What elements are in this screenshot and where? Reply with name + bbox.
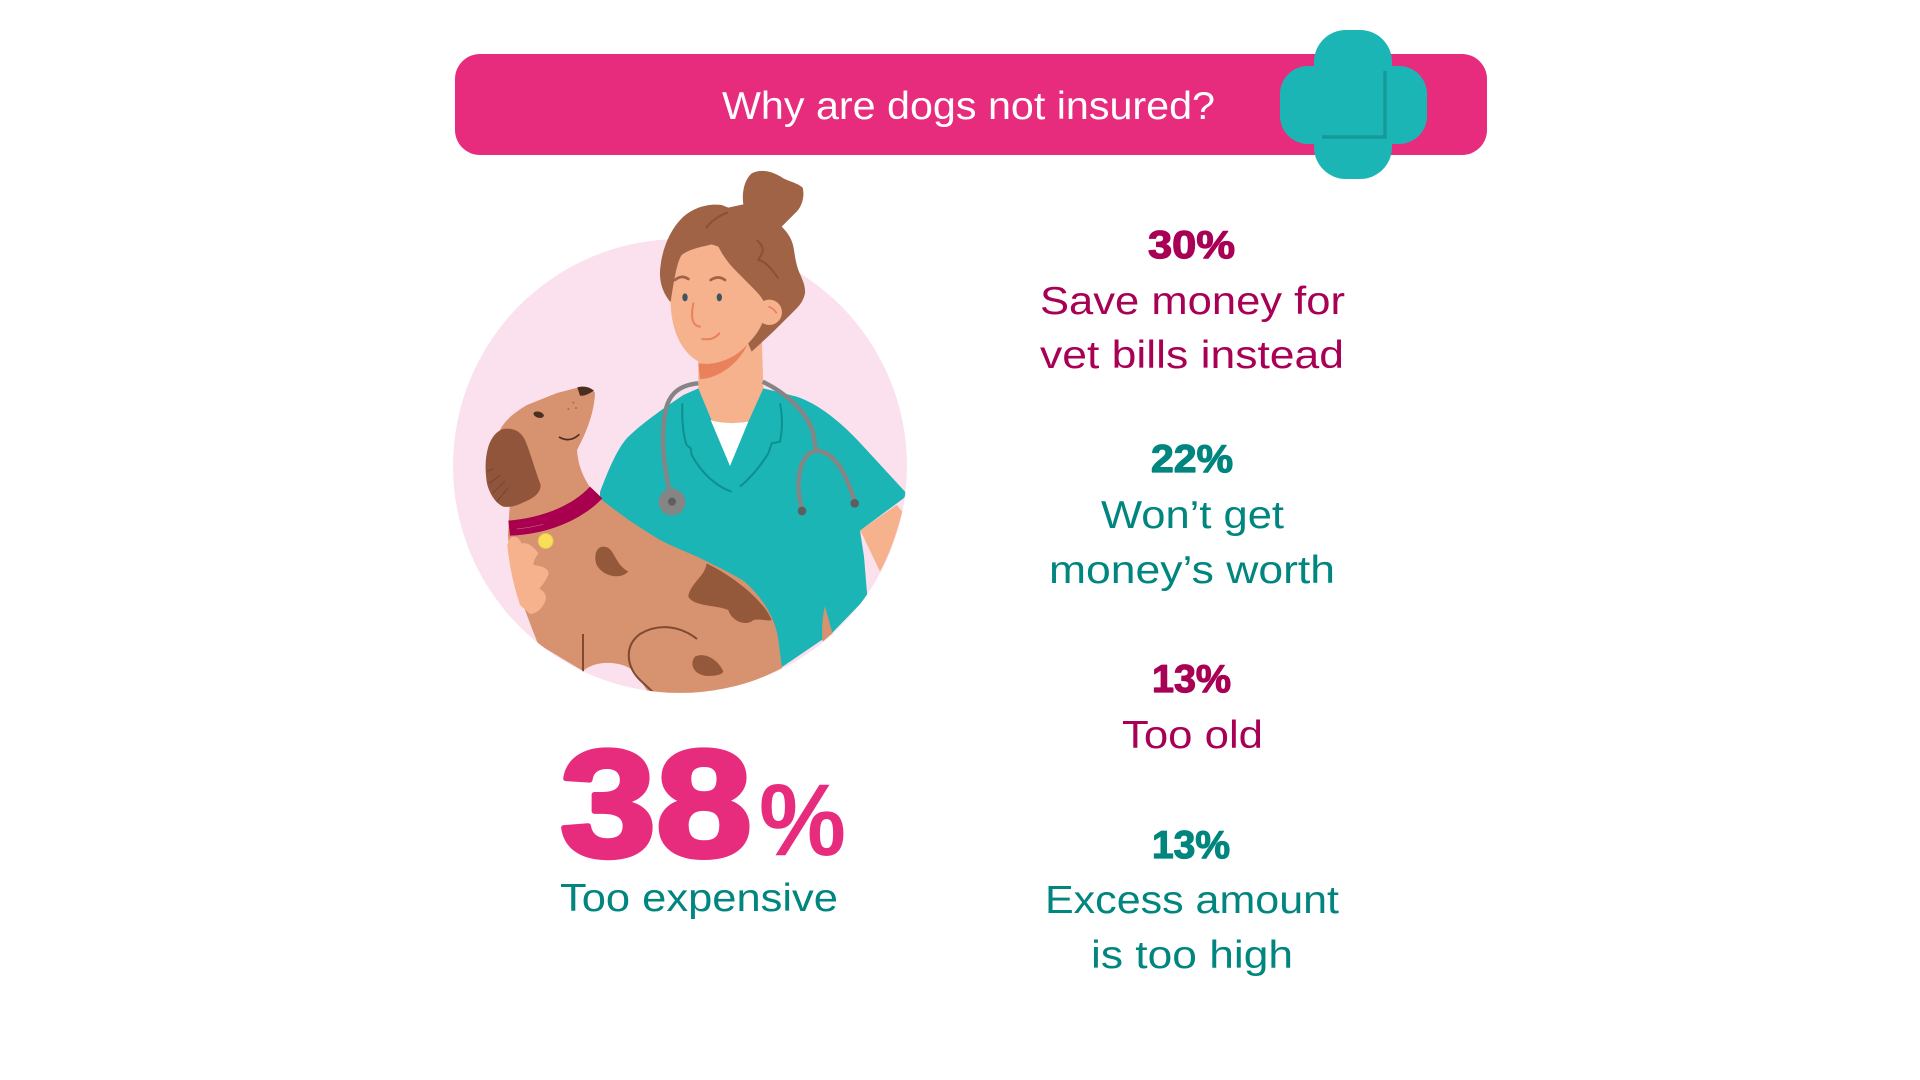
stat: 30% save money bbox=[1040, 224, 1345, 377]
big number: 38 bbox=[560, 719, 752, 889]
eyes bbox=[682, 293, 722, 301]
vet head bbox=[660, 171, 805, 379]
ear bbox=[762, 300, 782, 325]
figures clipped to circle bbox=[486, 171, 905, 696]
collar highlight bbox=[517, 524, 543, 529]
percentage: 13% bbox=[1152, 824, 1230, 867]
dog body bbox=[500, 387, 782, 696]
percent sign: % bbox=[759, 763, 846, 877]
collar tag bbox=[538, 534, 553, 548]
nose and mouth bbox=[692, 303, 719, 339]
dog ear bbox=[486, 429, 541, 507]
banner title: Why are dogs not insured? bbox=[722, 85, 1215, 128]
label: vet bills instead bbox=[1040, 334, 1344, 377]
dog nose bbox=[577, 387, 594, 396]
dog eye bbox=[534, 412, 544, 418]
stat: 13% too old bbox=[1122, 658, 1263, 757]
dog freckles bbox=[567, 402, 577, 410]
dog collar bbox=[508, 487, 602, 536]
undershirt bbox=[711, 420, 748, 466]
label: Won’t get bbox=[1101, 494, 1284, 537]
stat: 13% excess amount bbox=[1045, 824, 1339, 977]
hair strokes bbox=[706, 212, 778, 278]
illustration: vet with dog bbox=[453, 171, 907, 696]
banner bar bbox=[455, 54, 1487, 155]
stethoscope bbox=[659, 382, 859, 515]
hair and bun bbox=[660, 171, 805, 352]
ear line bbox=[768, 307, 777, 313]
dog mouth bbox=[559, 434, 579, 440]
scrubs collar lines bbox=[682, 403, 782, 492]
background circle bbox=[453, 239, 907, 693]
stat: 22% money's worth bbox=[1049, 438, 1335, 592]
label: Save money for bbox=[1040, 280, 1345, 323]
label: Excess amount bbox=[1045, 879, 1339, 922]
dog head details bbox=[486, 387, 628, 614]
vet neck bbox=[698, 333, 763, 423]
vet leg gap bbox=[822, 606, 832, 642]
label: money’s worth bbox=[1049, 549, 1335, 592]
dog leg lines bbox=[583, 627, 697, 694]
label: Too expensive bbox=[560, 877, 838, 920]
label: is too high bbox=[1091, 934, 1293, 977]
vet hand bbox=[507, 537, 548, 614]
ear fur lines bbox=[487, 468, 508, 502]
header banner bbox=[455, 30, 1487, 179]
percentage: 13% bbox=[1152, 658, 1231, 701]
vet arm bbox=[860, 505, 902, 572]
neck shadow bbox=[698, 344, 747, 379]
percentage: 22% bbox=[1151, 438, 1233, 481]
dog side spot bbox=[595, 547, 628, 576]
brows bbox=[675, 277, 725, 280]
vet torso bbox=[600, 333, 905, 668]
percentage: 30% bbox=[1148, 224, 1235, 267]
dog back patch and rear spot bbox=[688, 563, 772, 676]
face bbox=[671, 244, 766, 364]
icon: medical cross bbox=[1280, 30, 1427, 179]
label: Too old bbox=[1122, 714, 1263, 757]
stat: 38% too expensive bbox=[560, 719, 846, 920]
vet scrubs bbox=[600, 388, 905, 668]
